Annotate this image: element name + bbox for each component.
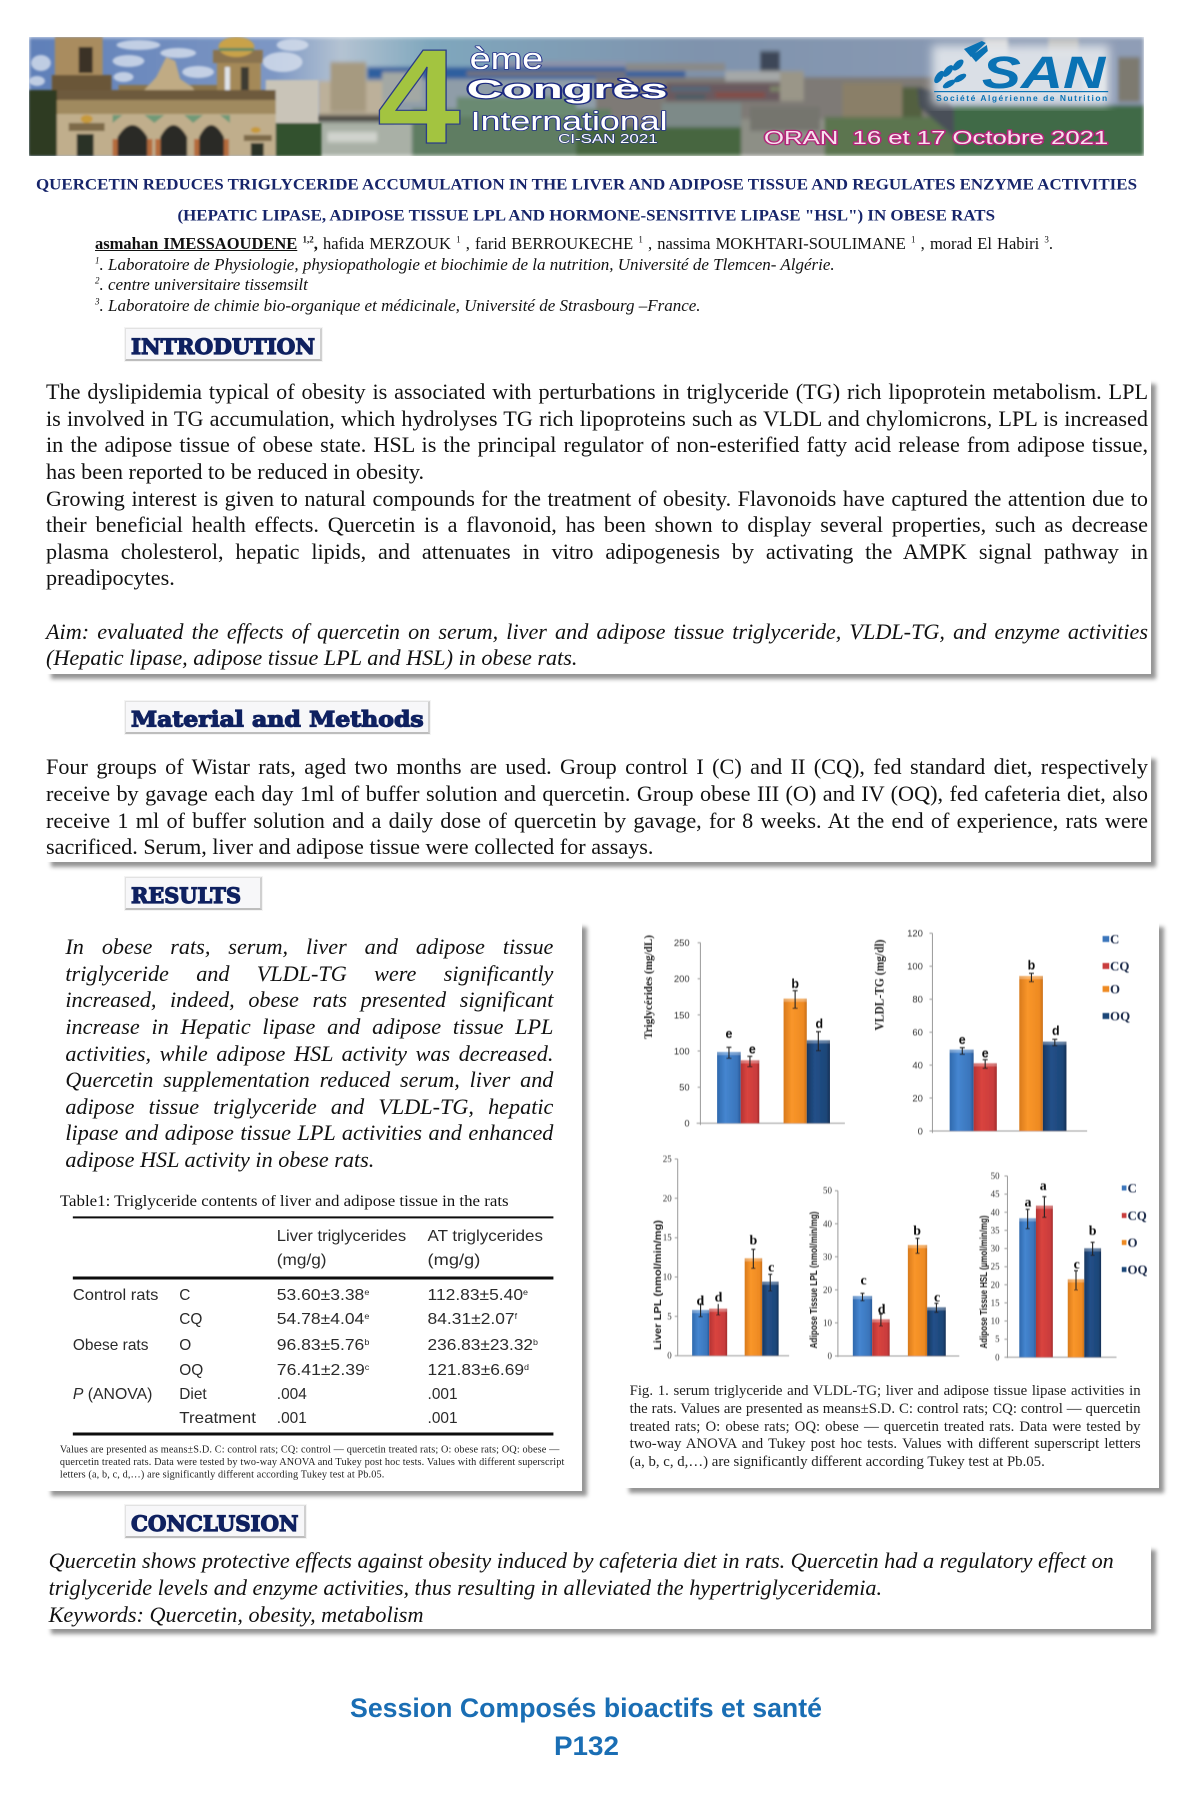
chart: adipose tissue HSL: 30 [991, 1243, 1000, 1254]
SAN logo [932, 41, 1108, 103]
chart: adipose tissue HSL: Adipose Tissue HSL (µmol/min/mg) [979, 1216, 990, 1348]
chart: triglycerides: b [791, 977, 799, 991]
chart: liver LPL: 20 [663, 1193, 672, 1203]
chart: VLDL-TG: d [1052, 1024, 1060, 1038]
table rows: OQ [179, 1362, 203, 1379]
text: results summary: In obese rats, serum, liver and adipose tissue [65, 934, 553, 959]
chart: adipose tissue HSL: b [1089, 1224, 1097, 1239]
title [36, 176, 1137, 224]
chart: triglycerides: 250 [674, 938, 690, 949]
affiliations: 3. Laboratoire de chimie bio-organique et médicinale, Université de Strasbourg –France. [95, 296, 701, 315]
table title: Table1: Triglyceride contents of liver and adipose tissue in the rats [60, 1193, 509, 1210]
table footnote: Values are presented as means±S.D. C: control rats; CQ: control — quercetin treated rats; O: obese rats; OQ: obese — [60, 1444, 560, 1456]
chart: adipose tissue HSL: 25 [991, 1262, 1000, 1272]
chart: liver LPL: d [715, 1291, 723, 1306]
text: introduction body: their beneficial health effects. Quercetin is a flavonoid, has been shown to display several properties, such as decrease [46, 512, 1148, 537]
affiliations: 1. Laboratoire de Physiologie, physiopathologie et biochimie de la nutrition, Université de Tlemcen- Algérie. [95, 255, 835, 274]
figure caption [630, 1383, 1141, 1470]
date: ORAN 16 et 17 Octobre 2021: ORAN 16 et 17 Octobre 2021 [764, 127, 1108, 148]
chart: VLDL-TG: 80 [912, 995, 923, 1006]
figure caption: treated rats; O: obese rats; OQ: obese — quercetin treated rats. Data were tested by [630, 1418, 1141, 1434]
text: introduction body: The dyslipidemia typical of obesity is associated with perturbations in triglyceride (TG) rich lipoprotein metabolism. LPL [46, 379, 1148, 404]
table rows: e [523, 1288, 529, 1297]
text: methods body: Four groups of Wistar rats, aged two months are used. Group control I (C) and II (CQ), fed standard diet, respectively [46, 754, 1148, 779]
text: results summary [65, 934, 554, 1172]
text: results summary: activities, while adipose HSL activity was decreased. [65, 1041, 553, 1066]
chart: liver LPL [653, 1154, 789, 1361]
legend: bottom charts: CQ [1127, 1208, 1147, 1223]
table rows: e [364, 1312, 370, 1321]
text: introduction body: is involved in TG accumulation, which hydrolyses TG rich lipoproteins such as VLDL and chylomicrons, LPL is increased [46, 406, 1148, 431]
table rows: 84.31±2.07 [428, 1311, 505, 1328]
heading: results: RESULTS [131, 884, 241, 909]
chart: VLDL-TG [872, 929, 1087, 1137]
table rows: Obese rats [73, 1337, 149, 1354]
chart: adipose tissue HSL: 20 [991, 1280, 1000, 1290]
chart: liver LPL: Liver LPL (nmol/min/mg) [653, 1220, 664, 1350]
chart: adipose tissue HSL [979, 1171, 1117, 1362]
table rows: 121.83±6.69 [428, 1362, 513, 1379]
panel: bar charts and caption [624, 922, 1159, 1488]
table rows: P (ANOVA) [73, 1386, 152, 1403]
table footnote: letters (a, b, c, d,…) are significantly different according Tukey test at Pb.05. [60, 1470, 384, 1481]
SAN logo: Société Algérienne de Nutrition [936, 93, 1107, 103]
table rows: Diet [179, 1386, 207, 1403]
table rows: AT triglycerides [428, 1228, 543, 1245]
text: methods body: sacrificed. Serum, liver and adipose tissue were collected for assays. [46, 834, 653, 859]
banner: 4ème Congrès International CI-SAN 2021 [29, 37, 1144, 156]
text: introduction body: Growing interest is given to natural compounds for the treatment of obesity. Flavonoids have captured the attention due to [46, 486, 1148, 511]
chart: adipose tissue HSL: 15 [991, 1298, 1000, 1308]
legend: bottom charts [1122, 1180, 1148, 1277]
legend: bottom charts: O [1127, 1235, 1138, 1250]
chart: adipose tissue LPL: c [934, 1290, 940, 1305]
session footer [350, 1693, 822, 1761]
chart: adipose tissue HSL: 35 [991, 1225, 1000, 1235]
table footnote: quercetin treated rats. Data were tested by two-way ANOVA and Tukey post hoc tests. Values with different superscript [60, 1457, 565, 1468]
chart: adipose tissue LPL: 30 [823, 1252, 832, 1262]
chart: adipose tissue HSL: c [1074, 1257, 1080, 1272]
chart: adipose tissue HSL: a [1024, 1195, 1031, 1210]
affiliations [95, 255, 835, 315]
chart: VLDL-TG: 100 [907, 962, 923, 973]
table 1: triglyceride contents [60, 1193, 565, 1481]
title: (HEPATIC LIPASE, ADIPOSE TISSUE LPL AND HORMONE-SENSITIVE LIPASE "HSL") IN OBESE RATS [178, 208, 995, 224]
heading: material and methods [125, 701, 430, 734]
table rows: f [515, 1312, 518, 1321]
charts [641, 929, 1148, 1362]
chart: liver LPL: 0 [667, 1351, 672, 1361]
logo glow [932, 45, 1109, 105]
text: methods body: receive 1 ml of buffer solution and a daily dose of quercetin by gavage, for 8 weeks. At the end of experience, rats were [46, 808, 1148, 833]
chart: VLDL-TG: 40 [912, 1060, 923, 1072]
table rows: (mg/g) [428, 1252, 480, 1269]
chart: VLDL-TG: 60 [912, 1028, 923, 1039]
panel: introduction [46, 379, 1151, 674]
chart: liver LPL: 10 [663, 1272, 672, 1282]
heading: introduction: INTRODUTION [131, 335, 315, 360]
figure caption: two-way ANOVA and Tukey post hoc tests. Values with different superscript letters [630, 1436, 1141, 1452]
table rows: .001 [428, 1386, 458, 1403]
chart: adipose tissue LPL: 50 [823, 1186, 832, 1196]
chart: triglycerides: e [725, 1027, 732, 1041]
table rows: e [364, 1288, 370, 1297]
chart: adipose tissue LPL: 20 [823, 1285, 832, 1295]
chart: adipose tissue HSL: 0 [995, 1352, 1000, 1362]
figure caption: Fig. 1. serum triglyceride and VLDL-TG; liver and adipose tissue lipase activities in [630, 1383, 1141, 1399]
table rows: b [364, 1338, 370, 1347]
chart: VLDL-TG: e [959, 1033, 966, 1047]
table rows: CQ [179, 1311, 202, 1328]
chart: triglycerides: 50 [679, 1083, 690, 1094]
text: introduction body: in the adipose tissue of obese state. HSL is the principal regulator of non-esterified fatty acid release from adipose tissue, [46, 432, 1148, 457]
table rows: d [524, 1363, 529, 1372]
table rows: (mg/g) [277, 1252, 327, 1269]
chart: liver LPL: c [768, 1261, 774, 1276]
chart: liver LPL: d [697, 1294, 705, 1309]
text: methods body: receive by gavage each day 1ml of buffer solution and quercetin. Group obese III (O) and IV (OQ), fed cafeteria diet, also [46, 781, 1148, 806]
chart: liver LPL: 5 [667, 1311, 672, 1321]
chart: triglycerides: 150 [674, 1010, 690, 1021]
text: results summary: increased, indeed, obese rats presented significant [65, 987, 553, 1012]
chart: adipose tissue LPL: 10 [823, 1318, 832, 1328]
chart: adipose tissue LPL [809, 1186, 959, 1361]
table rows: b [533, 1338, 539, 1347]
chart: triglycerides: e [749, 1043, 756, 1057]
chart: liver LPL: b [749, 1234, 757, 1249]
table rows: 236.83±23.32 [428, 1337, 522, 1354]
SAN logo: SAN [982, 47, 1107, 98]
chart: VLDL-TG: e [982, 1047, 989, 1061]
chart: VLDL-TG: 20 [912, 1093, 923, 1104]
icon: wheat ear [932, 41, 988, 90]
chart: adipose tissue LPL: 0 [827, 1351, 832, 1361]
figure caption: (a, b, c, d,…) are significantly different according Tukey test at Pb.05. [630, 1454, 1045, 1470]
session footer: Session Composés bioactifs et santé [350, 1693, 822, 1723]
chart: liver LPL: 25 [663, 1154, 672, 1164]
title: QUERCETIN REDUCES TRIGLYCERIDE ACCUMULATION IN THE LIVER AND ADIPOSE TISSUE AND REGULATES ENZYME ACTIVITIES [36, 176, 1137, 194]
chart: liver LPL: 15 [663, 1233, 672, 1243]
table rows: c [365, 1363, 369, 1372]
table footnote [60, 1444, 565, 1481]
table rows: .004 [277, 1386, 307, 1403]
text: results summary: adipose tissue triglyceride and VLDL-TG, hepatic [65, 1094, 553, 1119]
table rows: 54.78±4.04 [277, 1311, 354, 1328]
chart: triglycerides [641, 935, 845, 1130]
text: introduction body: preadipocytes. [46, 565, 175, 590]
text: introduction body: (Hepatic lipase, adipose tissue LPL and HSL) in obese rats. [46, 645, 577, 670]
chart: adipose tissue HSL: 10 [991, 1316, 1000, 1326]
ème: ème [470, 41, 543, 76]
chart: adipose tissue LPL: Adipose Tissue LPL (nmol/min/mg) [809, 1212, 820, 1348]
text: conclusion body: Keywords: Quercetin, obesity, metabolism [49, 1602, 423, 1627]
text: introduction body: plasma cholesterol, hepatic lipids, and attenuates in vitro adipogenesis by activating the AMPK signal pathway in [46, 539, 1148, 564]
legend: top charts [1103, 931, 1130, 1024]
banner photo background [29, 37, 1144, 156]
legend: top charts: O [1110, 981, 1120, 997]
chart: triglycerides: d [816, 1017, 823, 1031]
chart: adipose tissue HSL: 50 [991, 1171, 1000, 1181]
chart: triglycerides: 100 [674, 1046, 690, 1057]
Congrès: Congrès [467, 76, 668, 104]
table rows: 112.83±5.40 [428, 1287, 512, 1304]
legend: bottom charts: C [1127, 1180, 1137, 1196]
heading: results [125, 877, 262, 910]
legend: top charts: OQ [1110, 1008, 1130, 1024]
chart: adipose tissue LPL: d [878, 1302, 886, 1317]
table rows: C [179, 1287, 190, 1304]
text: introduction body: has been reported to be reduced in obesity. [46, 459, 424, 484]
legend: top charts: CQ [1110, 958, 1129, 974]
panel: conclusion [46, 1545, 1151, 1629]
chart: adipose tissue LPL: 40 [823, 1219, 832, 1229]
text: conclusion body: triglyceride levels and enzyme activities, thus resulting in alleviated the hypertriglyceridemia. [49, 1575, 882, 1600]
figure caption: the rats. Values are presented as means±S.D. C: control rats; CQ: control — quercetin [630, 1401, 1141, 1417]
chart: adipose tissue LPL: b [913, 1224, 921, 1239]
table rows: 53.60±3.38 [277, 1287, 354, 1304]
table rows: Control rats [73, 1287, 159, 1304]
chart: triglycerides: Triglycérides (mg/dL) [641, 935, 655, 1039]
session footer: P132 [554, 1731, 619, 1761]
text: results summary: adipose HSL activity in obese rats. [65, 1147, 374, 1172]
text: results summary: Quercetin supplementation reduced serum, liver and [65, 1067, 553, 1092]
chart: VLDL-TG: b [1028, 958, 1036, 972]
table rows: .001 [428, 1410, 458, 1427]
International: International [471, 108, 668, 136]
chart: adipose tissue LPL: c [860, 1274, 867, 1289]
legend: bottom charts: OQ [1127, 1262, 1148, 1277]
chart: VLDL-TG: VLDL-TG (mg/dl) [872, 940, 887, 1030]
text: conclusion body: Quercetin shows protective effects against obesity induced by cafeteria diet in rats. Quercetin had a regulatory effect on [49, 1548, 1114, 1573]
table rows: 96.83±5.76 [277, 1337, 354, 1354]
table rows [73, 1216, 553, 1436]
text: methods body [46, 754, 1148, 859]
theatre building [29, 37, 321, 156]
text: introduction body: Aim: evaluated the effects of quercetin on serum, liver and adipose tissue triglyceride, VLDL-TG, and enzyme activities [46, 619, 1148, 644]
text: introduction body [44, 379, 1148, 670]
legend: top charts: C [1110, 931, 1119, 947]
chart: VLDL-TG: 0 [918, 1126, 923, 1137]
table rows: Liver triglycerides [277, 1228, 406, 1245]
authors: asmahan IMESSAOUDENE 1,2, hafida MERZOUK 1 , farid BERROUKECHE 1 , nassima MOKHTARI-SOULIMANE 1 , morad El Habiri 3. [95, 234, 1053, 253]
affiliations: 2. centre universitaire tissemsilt [95, 275, 308, 294]
chart: triglycerides: 200 [674, 974, 690, 985]
table rows: 76.41±2.39 [277, 1362, 354, 1379]
panel: results summary and table [46, 922, 582, 1491]
chart: triglycerides: 0 [684, 1119, 690, 1130]
text: conclusion body [48, 1548, 1114, 1627]
chart: VLDL-TG: 120 [907, 929, 923, 940]
chart: adipose tissue HSL: 5 [995, 1334, 1000, 1344]
chart: adipose tissue HSL: 45 [991, 1189, 1000, 1199]
text: results summary: lipase and adipose tissue LPL activities and enhanced [65, 1120, 553, 1145]
table rows: .001 [277, 1410, 307, 1427]
table rows: O [179, 1337, 191, 1354]
chart: adipose tissue HSL: a [1040, 1179, 1047, 1194]
table rows: Treatment [179, 1410, 257, 1427]
text: results summary: triglyceride and VLDL-TG were significantly [65, 961, 553, 986]
chart: adipose tissue HSL: 40 [991, 1207, 1000, 1217]
heading: material and methods: Material and Methods [131, 708, 424, 732]
text: results summary: increase in Hepatic lipase and adipose tissue LPL [65, 1014, 553, 1039]
heading: conclusion: CONCLUSION [131, 1512, 298, 1537]
panel: methods [46, 754, 1151, 862]
CI-SAN 2021: CI-SAN 2021 [558, 131, 658, 146]
